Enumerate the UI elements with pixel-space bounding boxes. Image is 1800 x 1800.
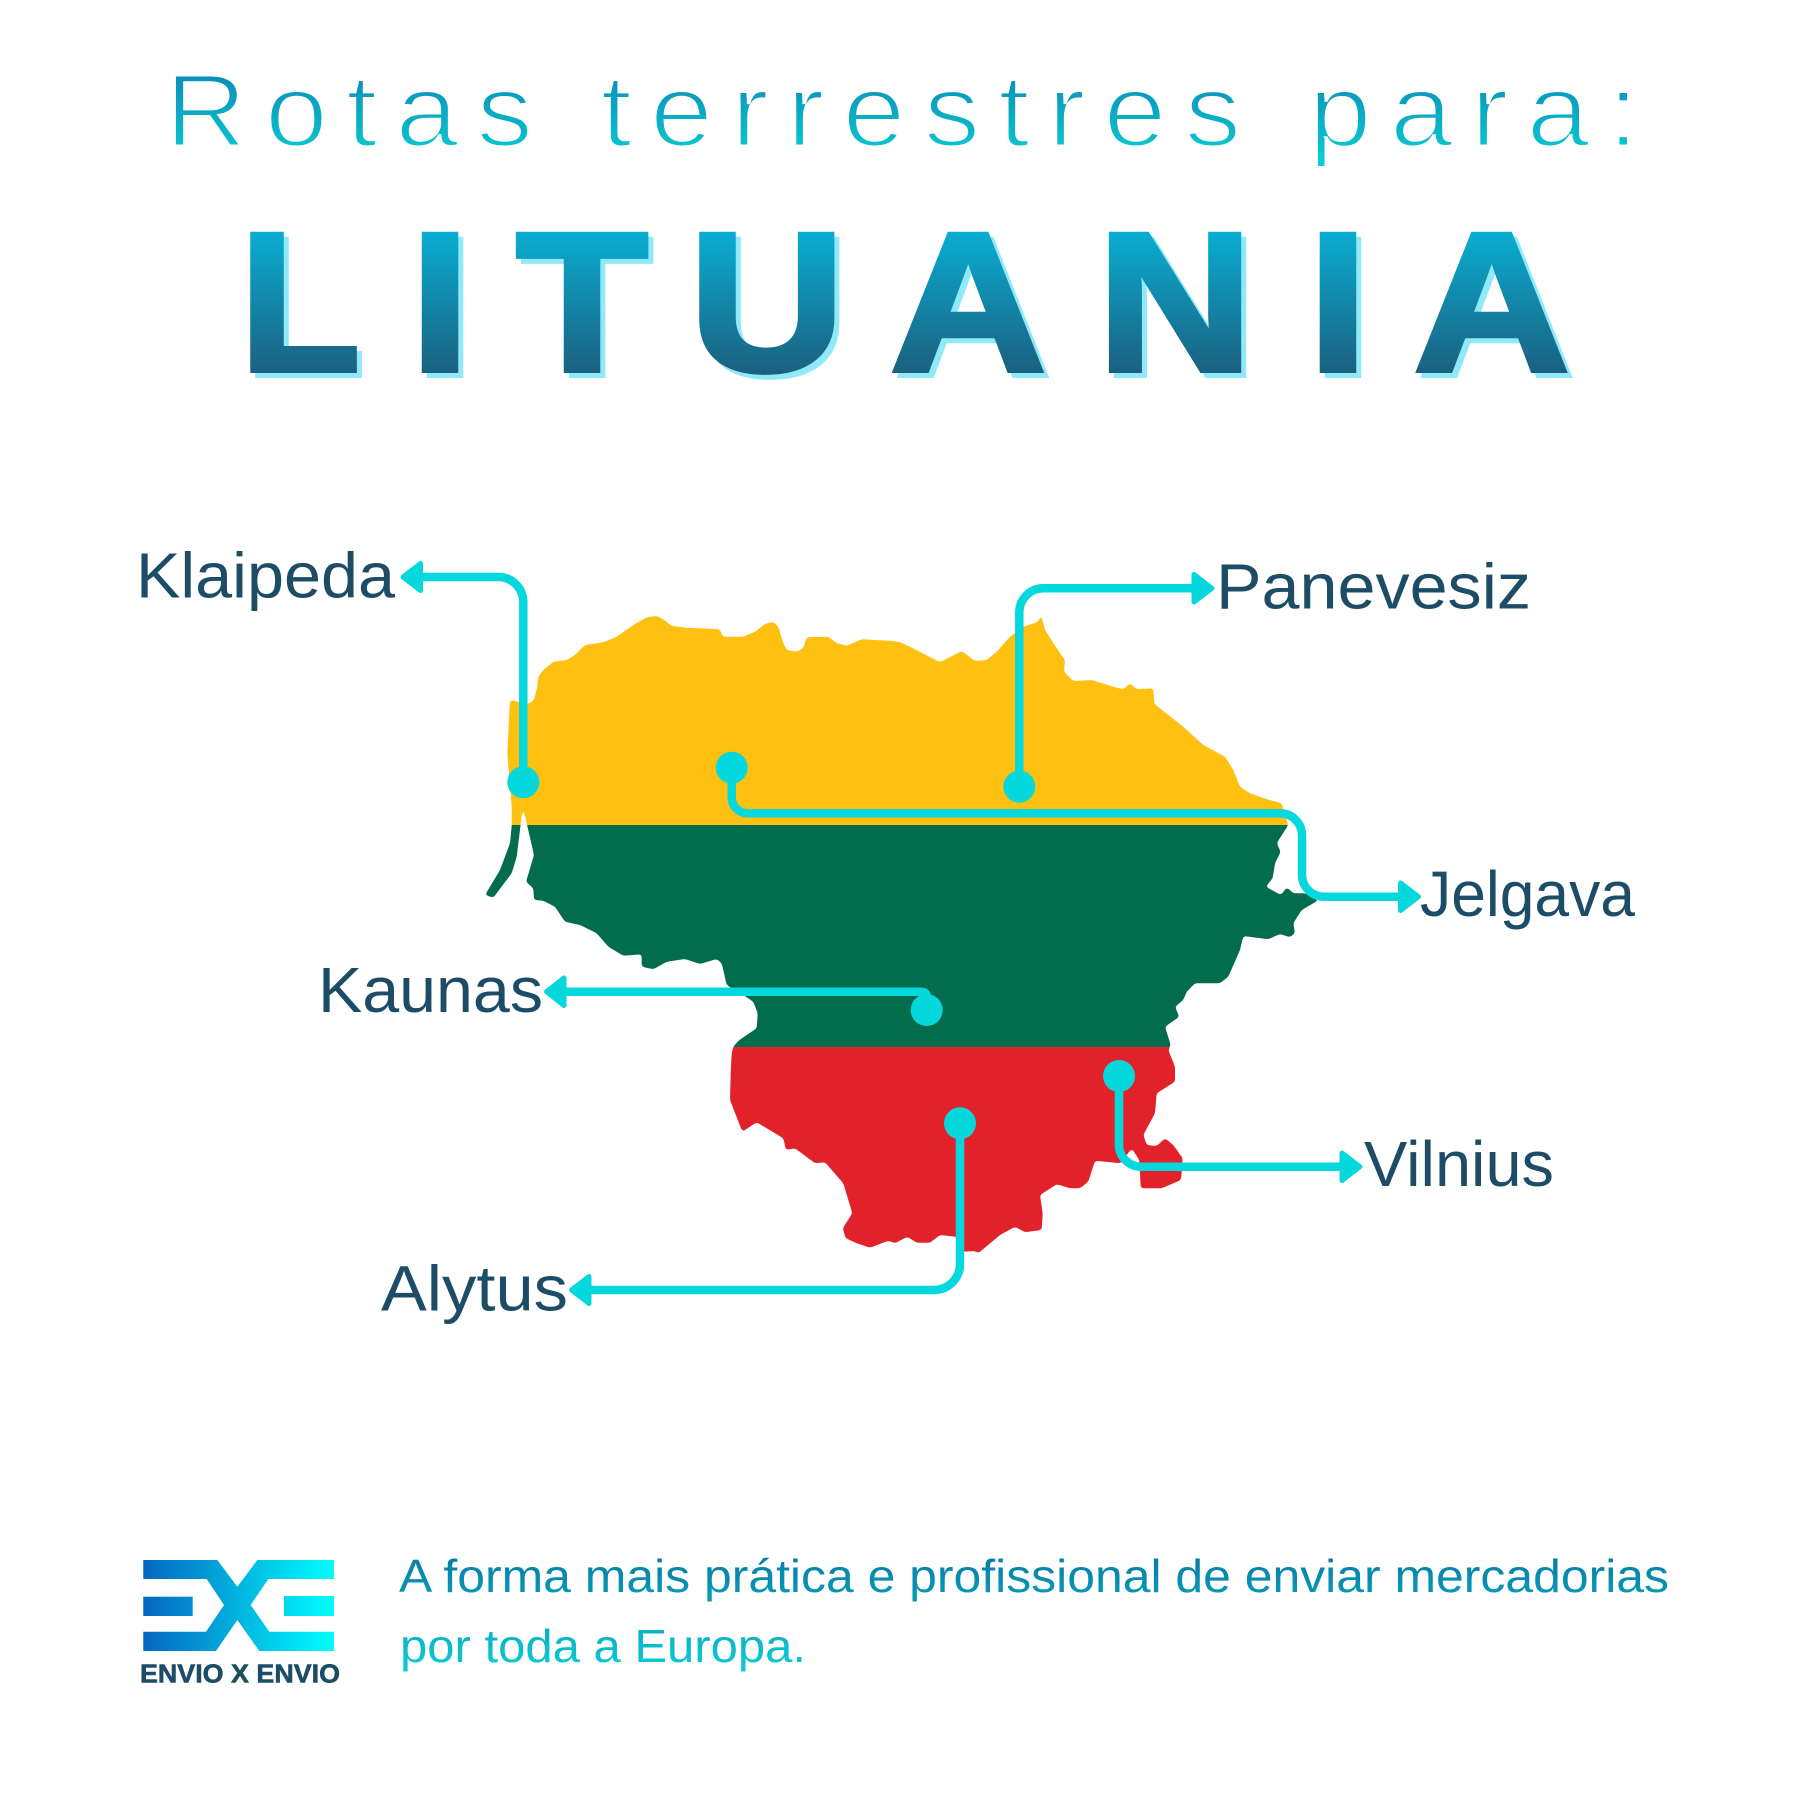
logo: Envio X Envio: [140, 1560, 340, 1689]
city label: Klaipeda: [136, 540, 395, 612]
tagline: [399, 1550, 1669, 1672]
route line: [1019, 588, 1200, 787]
city label: Kaunas: [318, 954, 543, 1026]
route line: [415, 577, 523, 782]
origin dot: [507, 766, 539, 798]
route: Klaipeda: [136, 540, 539, 798]
origin dot: [911, 994, 943, 1026]
route: Alytus: [381, 1107, 976, 1325]
city label: Jelgava: [1420, 858, 1635, 930]
origin dot: [1003, 771, 1035, 803]
tagline line 1: A forma mais prática e profissional de enviar mercadorias: [399, 1550, 1669, 1602]
logo wordmark: ENVIO X ENVIO: [140, 1659, 340, 1689]
arrowhead: [1400, 883, 1418, 910]
map of Lithuania in flag colours: [480, 610, 1325, 1257]
origin dot: [944, 1107, 976, 1139]
origin dot: [1103, 1060, 1135, 1092]
arrowhead: [546, 978, 564, 1006]
title: LITUANIA: L: [240, 192, 360, 412]
green band: [480, 825, 1325, 1047]
arrowhead: [1194, 574, 1212, 602]
city label: Vilnius: [1364, 1128, 1554, 1200]
origin dot: [716, 752, 748, 784]
city label: Panevesiz: [1216, 550, 1531, 622]
route: Vilnius: [1103, 1060, 1554, 1200]
route: Kaunas: [318, 954, 943, 1026]
red band: [730, 1047, 1182, 1252]
route line: [555, 992, 927, 1010]
arrowhead: [572, 1276, 589, 1304]
infographic canvas: [141, 76, 1668, 1683]
route line: [732, 768, 1410, 897]
arrowhead: [403, 564, 420, 590]
route: Jelgava: [716, 752, 1635, 930]
arrowhead: [1342, 1153, 1360, 1180]
city label: Alytus: [381, 1253, 568, 1325]
logo mark: [143, 1560, 334, 1651]
subtitle: Rotas terrestres para: Rotas terrestres para:: [165, 53, 1639, 168]
tagline line 2: por toda a Europa.: [400, 1620, 806, 1672]
route line: [580, 1123, 960, 1290]
title: LITUANIA: ITUANIA: [410, 192, 1570, 413]
yellow band: [507, 616, 1288, 825]
route line: [1119, 1076, 1350, 1167]
route: Panevesiz: [1003, 550, 1531, 803]
